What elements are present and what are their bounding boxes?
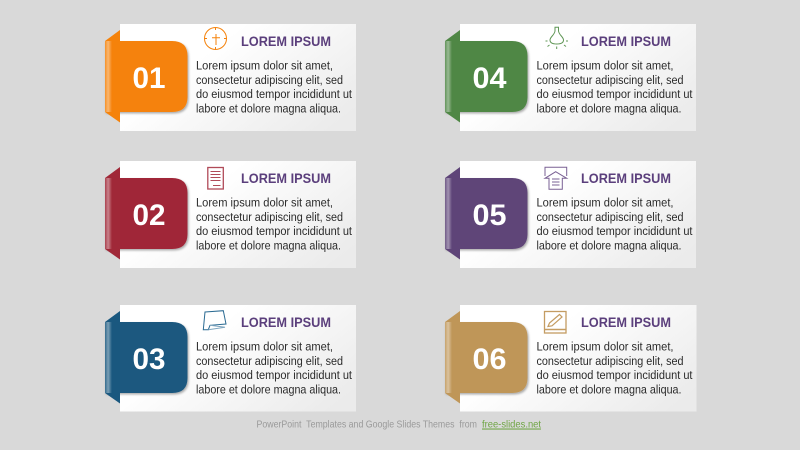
heading: LOREM IPSUM xyxy=(241,314,331,330)
number: 01 xyxy=(132,62,166,95)
heading: LOREM IPSUM xyxy=(581,33,671,49)
icon: folded paper xyxy=(203,311,226,330)
footer credit: free-slides.net xyxy=(482,418,541,430)
body text: labore et dolore magna aliqua. xyxy=(536,382,682,396)
body text: Lorem ipsum dolor sit amet, xyxy=(196,196,333,210)
icon: tablet with pen xyxy=(544,312,566,333)
panel background xyxy=(460,305,696,412)
panel background xyxy=(120,305,356,412)
footer credit: PowerPoint Templates and Google Slides Themes from xyxy=(256,418,477,430)
ribbon fold xyxy=(105,30,120,122)
card 01 xyxy=(105,24,356,131)
body text xyxy=(196,59,353,115)
heading: LOREM IPSUM xyxy=(581,314,671,330)
number: 05 xyxy=(472,199,506,232)
panel background xyxy=(120,161,356,268)
number tab xyxy=(105,178,188,249)
icon: house envelope xyxy=(545,167,567,189)
body text xyxy=(536,340,693,396)
heading: LOREM IPSUM xyxy=(241,33,331,49)
body text: do eiusmod tempor incididunt ut xyxy=(536,368,693,382)
number tab xyxy=(105,322,188,393)
number tab xyxy=(445,178,528,249)
body text xyxy=(196,340,353,396)
panel background xyxy=(460,24,696,131)
body text: labore et dolore magna aliqua. xyxy=(196,238,341,252)
tab highlight xyxy=(445,41,452,112)
body text: labore et dolore magna aliqua. xyxy=(196,382,341,396)
tab highlight xyxy=(445,322,452,393)
tab highlight xyxy=(445,178,452,249)
body text: consectetur adipiscing elit, sed xyxy=(196,210,343,224)
ribbon fold xyxy=(445,167,460,260)
body text: do eiusmod tempor incididunt ut xyxy=(196,224,353,238)
body text: do eiusmod tempor incididunt ut xyxy=(196,368,353,382)
number: 06 xyxy=(472,343,506,376)
number: 04 xyxy=(472,62,507,95)
body text: do eiusmod tempor incididunt ut xyxy=(536,224,693,238)
card 03 xyxy=(105,305,356,412)
number tab xyxy=(445,322,528,393)
card 02 xyxy=(105,161,356,268)
body text: consectetur adipiscing elit, sed xyxy=(536,210,684,224)
body text xyxy=(536,196,693,252)
number tab xyxy=(105,41,188,112)
icon: light bulb xyxy=(546,27,568,49)
body text: do eiusmod tempor incididunt ut xyxy=(196,87,353,101)
ribbon fold xyxy=(445,311,460,404)
number: 02 xyxy=(132,199,166,232)
body text: consectetur adipiscing elit, sed xyxy=(536,354,684,368)
tab highlight xyxy=(105,178,112,249)
number tab xyxy=(445,41,528,112)
body text: Lorem ipsum dolor sit amet, xyxy=(536,340,674,354)
card 05 xyxy=(445,161,696,268)
panel background xyxy=(460,161,696,268)
body text: labore et dolore magna aliqua. xyxy=(536,101,682,115)
ribbon fold xyxy=(105,167,120,260)
tab highlight xyxy=(105,41,112,112)
ribbon fold xyxy=(105,311,120,404)
body text: do eiusmod tempor incididunt ut xyxy=(536,87,693,101)
body text: consectetur adipiscing elit, sed xyxy=(536,73,684,87)
heading: LOREM IPSUM xyxy=(241,170,331,186)
body text: Lorem ipsum dolor sit amet, xyxy=(196,340,333,354)
body text xyxy=(536,59,693,115)
panel background xyxy=(120,24,356,131)
card 06 xyxy=(445,305,696,412)
body text: labore et dolore magna aliqua. xyxy=(536,238,682,252)
body text xyxy=(196,196,353,252)
ribbon fold xyxy=(445,30,460,122)
heading: LOREM IPSUM xyxy=(581,170,671,186)
body text: Lorem ipsum dolor sit amet, xyxy=(536,59,674,73)
icon: target xyxy=(204,28,226,50)
card 04 xyxy=(445,24,696,131)
body text: consectetur adipiscing elit, sed xyxy=(196,73,343,87)
icon: document xyxy=(208,168,223,189)
body text: Lorem ipsum dolor sit amet, xyxy=(536,196,674,210)
number: 03 xyxy=(132,343,166,376)
body text: Lorem ipsum dolor sit amet, xyxy=(196,59,333,73)
body text: consectetur adipiscing elit, sed xyxy=(196,354,343,368)
body text: labore et dolore magna aliqua. xyxy=(196,101,341,115)
tab highlight xyxy=(105,322,112,393)
